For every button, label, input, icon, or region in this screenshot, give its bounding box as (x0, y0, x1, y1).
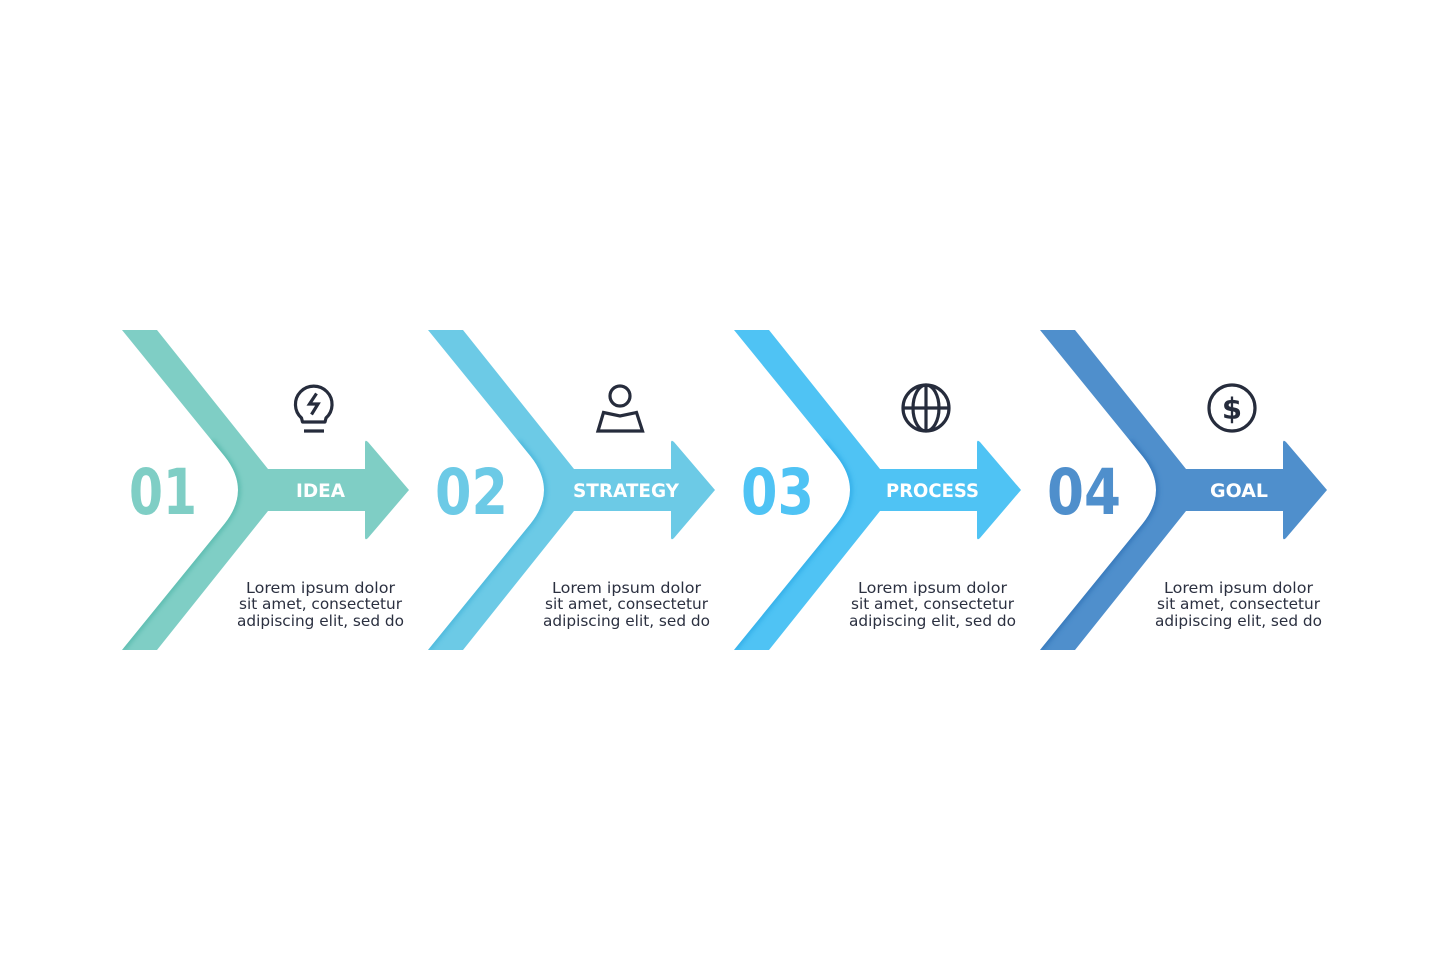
label: idea: IDEA (296, 480, 345, 502)
description 1: adipiscing elit, sed do (237, 612, 404, 630)
description 2: adipiscing elit, sed do (543, 612, 710, 630)
number 04: 04 (1047, 456, 1121, 529)
number 02: 02 (435, 456, 508, 529)
description 3: Lorem ipsum dolor (858, 579, 1008, 597)
label: process: PROCESS (886, 480, 979, 502)
arrow 4 (1040, 330, 1327, 650)
icon: light bulb (295, 386, 332, 431)
description 4 (1155, 579, 1322, 630)
description 1 (237, 579, 404, 630)
description 1: Lorem ipsum dolor (246, 579, 396, 597)
description 4: Lorem ipsum dolor (1164, 579, 1314, 597)
description 3: sit amet, consectetur (851, 595, 1015, 613)
description 1: sit amet, consectetur (239, 595, 403, 613)
icon: dollar coin (1209, 385, 1255, 431)
step 4: goal (1040, 330, 1327, 650)
description 4: sit amet, consectetur (1157, 595, 1321, 613)
description 2: sit amet, consectetur (545, 595, 709, 613)
arrow 3 (734, 330, 1021, 650)
step 2: strategy (428, 330, 715, 650)
description 3 (849, 579, 1016, 630)
icon: dollar coin: $ (1222, 392, 1242, 426)
step 1: idea (122, 330, 409, 650)
description 2: Lorem ipsum dolor (552, 579, 702, 597)
number 01: 01 (129, 456, 197, 529)
icon: person with book (598, 386, 642, 431)
icon: globe (903, 385, 949, 431)
label: strategy: STRATEGY (573, 480, 679, 502)
arrow 2 (428, 330, 715, 650)
arrow 1 (122, 330, 409, 650)
description 3: adipiscing elit, sed do (849, 612, 1016, 630)
number 03: 03 (741, 456, 814, 529)
label: goal: GOAL (1210, 480, 1268, 502)
description 2 (543, 579, 710, 630)
description 4: adipiscing elit, sed do (1155, 612, 1322, 630)
step 3: process (734, 330, 1021, 650)
